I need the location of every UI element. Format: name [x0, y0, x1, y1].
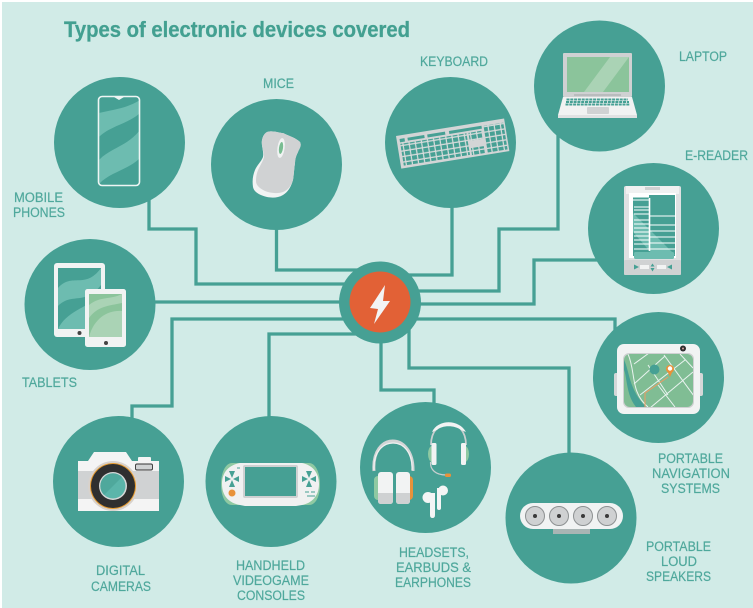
label: handheld videogame consoles	[233, 558, 309, 603]
central hub with lightning bolt	[339, 262, 421, 344]
label: portable loud speakers: LOUD	[661, 554, 697, 569]
label: portable navigation systems: PORTABLE	[658, 451, 723, 466]
label: mobile phones	[13, 190, 65, 220]
label: headsets, earbuds and earphones: HEADSETS,	[399, 545, 469, 560]
earbuds	[422, 486, 448, 518]
label: headsets, earbuds and earphones: EARBUDS &	[396, 560, 471, 575]
device: portable speakers	[506, 452, 636, 584]
label: portable loud speakers: PORTABLE	[646, 539, 711, 554]
label: tablets: TABLETS	[22, 375, 77, 390]
label: handheld videogame consoles: HANDHELD	[236, 558, 305, 573]
label: portable navigation systems: NAVIGATION	[652, 466, 730, 481]
label: portable loud speakers	[646, 539, 711, 584]
label: handheld videogame consoles: VIDEOGAME	[233, 573, 309, 588]
label: headsets, earbuds and earphones	[395, 545, 471, 590]
device: laptop	[534, 20, 665, 152]
device: mobile phone	[54, 77, 185, 208]
label: mobile phones: MOBILE	[14, 190, 63, 205]
label: headsets, earbuds and earphones: EARPHONES	[395, 575, 471, 590]
label: laptop: LAPTOP	[679, 49, 727, 64]
over-ear headphones	[374, 441, 413, 504]
label: digital cameras: CAMERAS	[91, 579, 151, 594]
label: digital cameras	[91, 563, 151, 594]
label: e-reader: E-READER	[685, 148, 748, 163]
device: mouse	[211, 99, 342, 230]
label: handheld videogame consoles: CONSOLES	[237, 588, 305, 603]
label: mice: MICE	[263, 76, 294, 91]
label: portable loud speakers: SPEAKERS	[646, 569, 711, 584]
device: tablets	[24, 239, 156, 370]
title: Types of electronic devices covered	[64, 17, 410, 42]
device: handheld console	[206, 416, 336, 547]
connector lines	[132, 135, 615, 456]
device: portable navigation system	[593, 312, 724, 443]
icon: lightning bolt	[370, 285, 390, 324]
label: mobile phones: PHONES	[13, 205, 65, 220]
label: portable navigation systems: SYSTEMS	[661, 481, 720, 496]
headset with microphone	[428, 422, 469, 477]
label: keyboard: KEYBOARD	[420, 54, 488, 69]
device: e-reader	[588, 163, 719, 294]
label: portable navigation systems	[652, 451, 730, 496]
device: digital camera	[53, 416, 184, 547]
label: digital cameras: DIGITAL	[96, 563, 145, 578]
device: headsets and earbuds	[360, 402, 491, 533]
device: keyboard	[385, 77, 516, 208]
